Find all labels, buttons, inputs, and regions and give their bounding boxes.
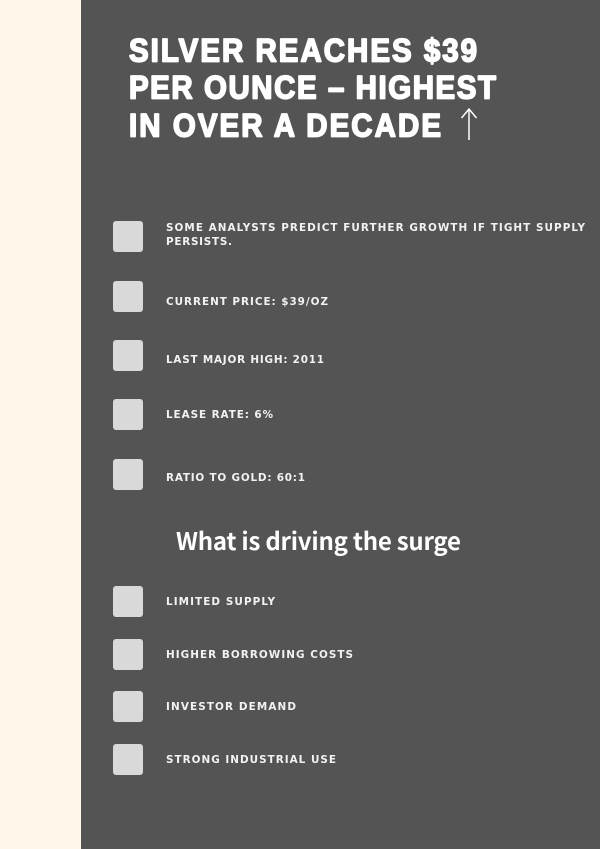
item: lease rate: LEASE RATE: 6% — [166, 409, 274, 421]
item: current price: CURRENT PRICE: $39/OZ — [166, 296, 328, 308]
heading: what is driving the surge: What is driving the surge — [176, 522, 461, 557]
title: SILVER REACHES $39 — [129, 32, 477, 69]
checklist: key facts — [113, 221, 585, 490]
item: analysts prediction: SOME ANALYSTS PREDICT FURTHER GROWTH IF TIGHT SUPPLY — [166, 222, 585, 234]
item: investor demand — [113, 691, 296, 722]
item: last major high — [113, 340, 324, 371]
item: higher borrowing costs: HIGHER BORROWING COSTS — [166, 649, 353, 661]
item: strong industrial use — [113, 744, 336, 775]
item: ratio to gold — [113, 459, 305, 490]
title — [129, 32, 496, 144]
item: higher borrowing costs — [113, 639, 353, 670]
item: ratio to gold: RATIO TO GOLD: 60:1 — [166, 472, 305, 484]
title: PER OUNCE – HIGHEST — [129, 69, 496, 106]
item: investor demand: INVESTOR DEMAND — [166, 701, 296, 713]
title: IN OVER A DECADE — [129, 107, 441, 144]
item: last major high: LAST MAJOR HIGH: 2011 — [166, 354, 324, 366]
cream side panel — [0, 0, 81, 849]
item: limited supply: LIMITED SUPPLY — [166, 596, 275, 608]
checklist: drivers — [113, 586, 353, 775]
icon: up arrow — [462, 109, 476, 140]
item: analysts prediction — [113, 221, 585, 252]
item: current price — [113, 281, 328, 312]
item: lease rate — [113, 399, 274, 430]
item: strong industrial use: STRONG INDUSTRIAL USE — [166, 754, 336, 766]
item: analysts prediction: PERSISTS. — [166, 236, 232, 248]
item: limited supply — [113, 586, 275, 617]
